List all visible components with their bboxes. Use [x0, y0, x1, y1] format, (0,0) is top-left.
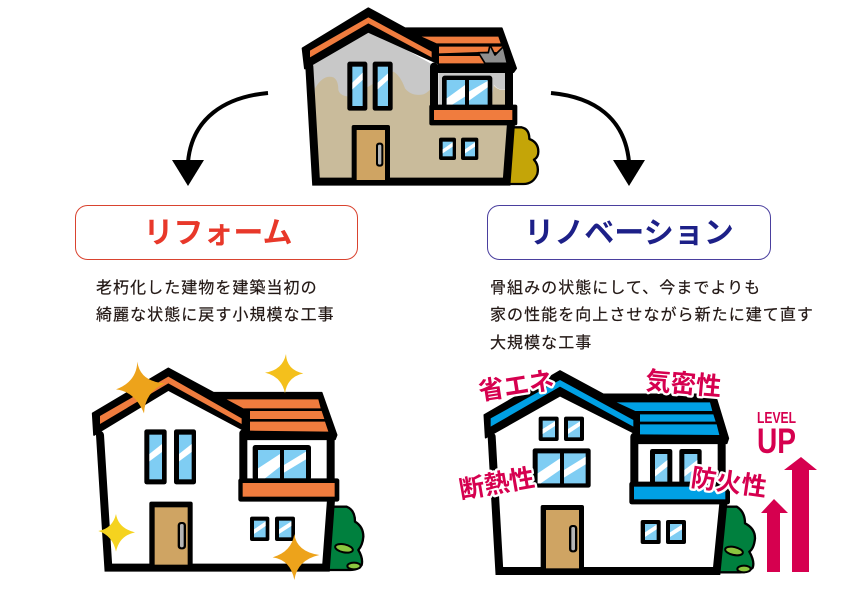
text: reform description: 老朽化した建物を建築当初の [96, 279, 318, 297]
small windows [250, 517, 295, 541]
sparkle: gold top-right [265, 354, 303, 393]
text: renovation description: 大規模な工事 [490, 334, 592, 352]
roof: damage [478, 45, 507, 63]
wall outlines [309, 67, 511, 182]
text: renovation description: 家の性能を向上させながら新たに建て直す [490, 306, 814, 324]
balcony [238, 478, 339, 502]
label: energy saving: 省エネ [477, 367, 556, 406]
reform house illustration [93, 354, 363, 580]
roof: blue gable [491, 380, 633, 427]
arrow: small up [761, 499, 788, 572]
attic windows [539, 417, 584, 441]
roof: blue stripes [617, 402, 719, 435]
level up graphic [757, 410, 817, 572]
upper windows [144, 429, 196, 484]
text: reform description [96, 279, 335, 324]
label: insulation: 断熱性 [457, 464, 537, 505]
wall outlines [492, 437, 723, 571]
wall outlines [100, 433, 331, 568]
label: airtightness: 気密性 [644, 367, 722, 402]
heading box: renovation: リノベーション [524, 217, 734, 250]
bush: yellow [507, 127, 538, 184]
old house illustration [303, 8, 538, 184]
wall: stained lower [315, 72, 507, 182]
balcony [629, 482, 730, 504]
label: fire resistance: 防火性 [689, 464, 768, 502]
level up text: LEVEL [757, 410, 796, 427]
small windows [439, 138, 478, 160]
roof: black outline [93, 368, 337, 439]
text: reform description: 綺麗な状態に戻す小規模な工事 [96, 306, 335, 324]
bush: green [325, 507, 363, 570]
wall [492, 395, 722, 570]
large window [533, 448, 591, 488]
bush leaves [724, 545, 751, 572]
door [352, 125, 390, 182]
sparkle: orange lower-right [273, 534, 319, 580]
roof: orange stripes [422, 37, 503, 63]
heading box: renovation [488, 206, 770, 260]
sparkle: yellow lower-left [98, 514, 135, 552]
roof: orange gable [310, 17, 432, 57]
door [541, 505, 584, 569]
heading box: reform: リフォーム [143, 217, 293, 250]
heading box: reform [76, 206, 358, 260]
roof: black outline [303, 8, 516, 72]
arrow: right [551, 93, 645, 186]
renovation house illustration [457, 367, 768, 572]
door [149, 502, 193, 567]
sparkle: orange top-left [116, 362, 165, 413]
roof: black outline [484, 371, 728, 443]
text: renovation description [490, 279, 814, 352]
balcony [429, 105, 517, 125]
bush: green [715, 507, 755, 572]
roof: orange stripes [227, 399, 328, 432]
balcony window [253, 445, 311, 480]
wall: grey upper [311, 28, 508, 182]
roof: orange gable [100, 377, 242, 424]
level up text [757, 410, 796, 461]
wall [101, 390, 330, 567]
upper right windows [650, 449, 702, 486]
arrow: large up [784, 457, 817, 572]
balcony window [442, 76, 492, 107]
bush leaves [334, 543, 361, 569]
level up text: UP [757, 422, 796, 461]
small windows [641, 520, 686, 544]
upper windows [347, 62, 393, 111]
arrow: left [172, 93, 268, 186]
text: renovation description: 骨組みの状態にして、今までよりも [490, 279, 761, 297]
upper right wall [438, 72, 505, 107]
